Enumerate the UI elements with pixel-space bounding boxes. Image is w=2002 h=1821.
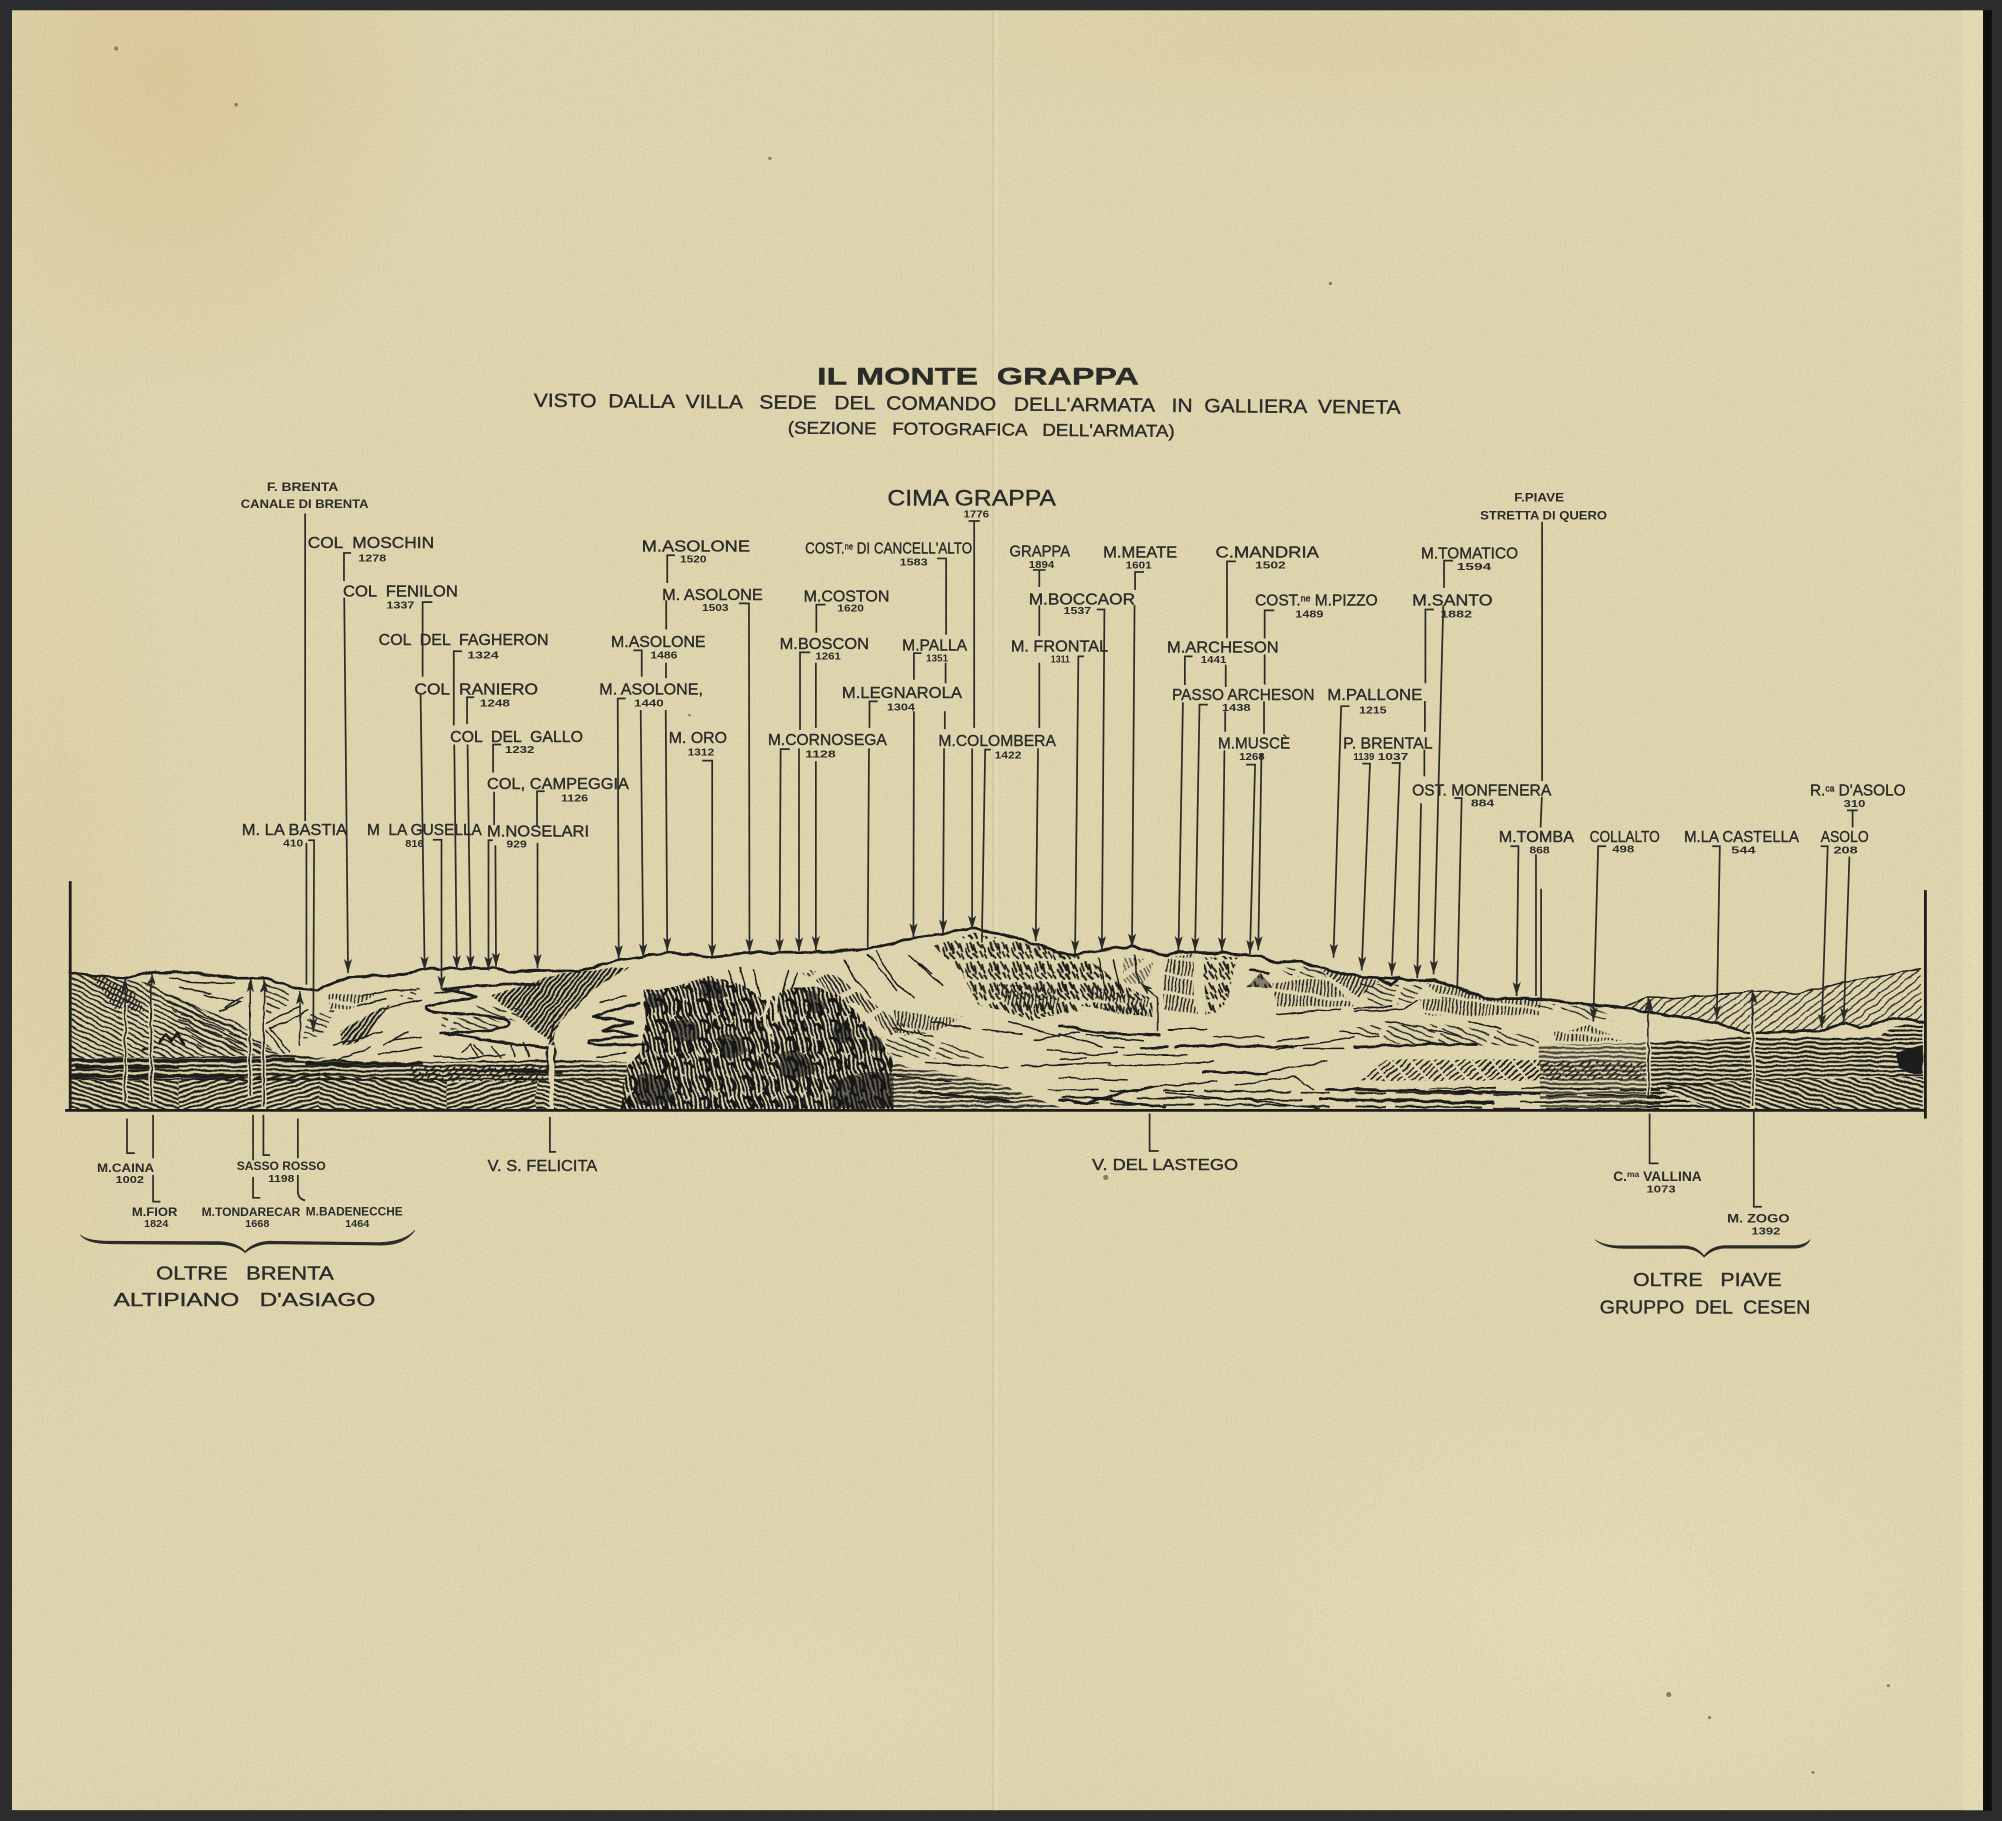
label: Ost. Monfenera 884: 884 <box>1471 799 1495 810</box>
label: M. Asolone 1503 <box>662 587 763 953</box>
label: M. Asolone 1440: M. ASOLONE, <box>599 681 703 698</box>
label: M. Noselari 929: 929 <box>506 840 527 851</box>
valley del Lastego: sparse lines <box>894 1022 1540 1108</box>
label: M. Tondarecar 1668: M.TONDARECAR <box>202 1205 301 1219</box>
label: M. Palla 1351 <box>902 637 967 937</box>
label: Costone di Cancell'Alto 1583: ne <box>845 542 853 552</box>
label: Col Campeggia 1126 <box>487 776 629 968</box>
label: M. Archeson 1441: 1441 <box>1201 655 1227 666</box>
label: F. Piave, Stretta di Quero: STRETTA DI QUERO <box>1480 509 1607 523</box>
label: Costone M. Pizzo 1489 <box>1255 592 1378 950</box>
label: Cima Grappa 1776: 1776 <box>963 510 989 521</box>
label: Costone di Cancell'Alto 1583 <box>805 541 972 933</box>
label: M. Colombera 1422 <box>938 733 1056 942</box>
label: M. Asolone 1520: M.ASOLONE <box>642 539 750 556</box>
label: C. Mandria 1502 <box>1215 544 1319 951</box>
label: M. Meate 1601: M.MEATE <box>1103 544 1177 561</box>
label: M. Archeson 1441 <box>1167 639 1279 950</box>
label: M. Caina 1002: 1002 <box>116 1175 144 1186</box>
label: M. Noselari 929: M.NOSELARI <box>487 823 589 840</box>
label: Asolo 208: ASOLO <box>1821 829 1869 846</box>
label: M. Pallone 1215 <box>1327 687 1422 958</box>
label: F. Piave, Stretta di Quero: F.PIAVE <box>1514 490 1564 504</box>
label: P. Brental 1139 and 1037: 1139 <box>1353 752 1375 763</box>
label: Grappa 1894 <box>1010 543 1070 941</box>
label: M. Asolone 1520 <box>642 539 750 951</box>
label: Col del Gallo 1232: 1232 <box>505 745 535 756</box>
label: M. Frontal 1311: M. FRONTAL <box>1011 638 1108 655</box>
label: M. Boccaor 1537 <box>1029 592 1135 950</box>
label: M. Palla 1351: M.PALLA <box>902 637 967 654</box>
label: M. Santo 1882 <box>1412 592 1493 978</box>
label: M. Palla 1351: 1351 <box>926 653 948 664</box>
up-pointing markers with halos inside terrain <box>125 972 1753 1110</box>
label: M. Asolone 1503: 1503 <box>702 603 729 614</box>
region label: Oltre Piave, Gruppo del Cesen <box>1600 1269 1810 1318</box>
label: Col del Gallo 1232 <box>450 729 583 967</box>
region label: Oltre Piave, Gruppo del Cesen: OLTRE PIAVE <box>1633 1269 1782 1290</box>
label: M. Fior 1824 <box>132 1115 178 1230</box>
label: Asolo 208 <box>1821 829 1869 1028</box>
label: Col Moschin 1278: COL MOSCHIN <box>308 535 434 552</box>
label: C. Mandria 1502: C.MANDRIA <box>1215 544 1319 561</box>
label: M. la Gusella 816: M LA GUSELLA <box>367 822 482 839</box>
label: M. Coston 1620 <box>804 588 889 950</box>
label: M. Colombera 1422: 1422 <box>995 751 1022 762</box>
label: Cima Grappa 1776 <box>887 486 1056 930</box>
label: M. Pallone 1215: M.PALLONE <box>1327 687 1422 704</box>
label: Costone M. Pizzo 1489: M.PIZZO <box>1310 592 1378 609</box>
panorama engraving of the Monte Grappa massif <box>70 928 1923 1110</box>
label: M. Pallone 1215: 1215 <box>1359 706 1387 717</box>
label: M. Asolone 1440: 1440 <box>634 699 664 710</box>
label: M. Colombera 1422: M.COLOMBERA <box>938 733 1056 750</box>
central slopes below Cima Grappa <box>807 933 1155 1060</box>
label: M. Caina 1002: M.CAINA <box>97 1161 154 1175</box>
region label: Oltre Brenta, Altipiano d'Asiago: ALTIPIANO D'ASIAGO <box>114 1289 375 1310</box>
label: M. Frontal 1311: 1311 <box>1051 655 1070 666</box>
label: M. la Castella 544: M.LA CASTELLA <box>1684 829 1799 846</box>
label: M. Tomatico 1594 <box>1421 545 1518 974</box>
labels centre group: Asolone, Coston, Cima Grappa <box>599 486 1056 959</box>
label: M. Asolone 1486 <box>611 634 706 958</box>
label: Rocca d'Asolo 310: D'ASOLO <box>1834 782 1906 799</box>
label: M. Asolone 1486: 1486 <box>650 651 678 662</box>
label: M. Tondarecar 1668 <box>202 1115 301 1230</box>
label: Cima Vallina 1073: VALLINA <box>1639 1169 1702 1184</box>
title block <box>534 363 1401 441</box>
brace: Oltre Piave <box>1595 1240 1810 1257</box>
label: M. Asolone 1486: M.ASOLONE <box>611 634 706 651</box>
label: M. la Castella 544: 544 <box>1731 846 1756 857</box>
label: M. Badenecche 1464: 1464 <box>345 1219 370 1230</box>
label: Costone M. Pizzo 1489: COST. <box>1255 592 1302 609</box>
eastern ridges: Archeson, Pallone, Monfenera <box>1085 954 1623 1041</box>
label: Passo Archeson 1438 <box>1172 687 1314 951</box>
label: Col Fenilon 1337: COL FENILON <box>343 583 458 600</box>
label: Col del Fagheron 1324: 1324 <box>467 651 499 662</box>
label: M. Tomba 868 <box>1499 829 1574 996</box>
label: Rocca d'Asolo 310 <box>1810 782 1906 1022</box>
label: Col Moschin 1278 <box>308 535 434 973</box>
label: F. Brenta, Canale di Brenta <box>241 480 369 985</box>
label: V. S. Felicita: V. S. FELICITA <box>488 1158 598 1175</box>
label: Col Fenilon 1337: 1337 <box>386 601 415 612</box>
label: M. Archeson 1441: M.ARCHESON <box>1167 639 1279 656</box>
label: M. Asolone 1503: M. ASOLONE <box>662 587 763 604</box>
label: V. del Lastego <box>1092 1114 1238 1174</box>
label: Rocca d'Asolo 310: R. <box>1810 782 1826 799</box>
subtitle: VISTO DALLA VILLA SEDE DEL COMANDO DELL'ARMATA IN GALLIERA VENETA <box>534 391 1401 419</box>
ridgeline of the massif <box>70 928 1647 1011</box>
label: Cima Vallina 1073 <box>1613 1114 1702 1196</box>
label: Cima Vallina 1073: 1073 <box>1647 1185 1676 1196</box>
label: M. Meate 1601 <box>1103 544 1177 948</box>
label: Ost. Monfenera 884 <box>1412 783 1552 986</box>
label: M. Tomba 868: 868 <box>1529 846 1550 857</box>
label: M. Boscon 1261: M.BOSCON <box>780 636 869 653</box>
label: C. Mandria 1502: 1502 <box>1255 561 1286 572</box>
label: M. Asolone 1520: 1520 <box>680 555 707 566</box>
label: P. Brental 1139 and 1037 <box>1343 735 1433 976</box>
brace: Oltre Brenta <box>80 1230 415 1253</box>
label: F. Brenta, Canale di Brenta: F. BRENTA <box>267 480 339 494</box>
title: Il Monte Grappa: IL MONTE GRAPPA <box>817 363 1139 390</box>
label: M. Coston 1620: 1620 <box>837 604 864 615</box>
label: P. Brental 1139 and 1037: P. BRENTAL <box>1343 735 1433 752</box>
label: Costone di Cancell'Alto 1583: COST. <box>805 541 852 558</box>
label: M. Zogo 1392 <box>1727 1110 1790 1238</box>
label: M. Badenecche 1464: M.BADENECCHE <box>306 1205 403 1219</box>
label: M. Cornosega 1128 <box>768 732 887 953</box>
labels right group: Grappa to Monfenera <box>1010 490 1906 1028</box>
label: M. la Bastia 410: 410 <box>283 838 303 849</box>
label: Grappa 1894: 1894 <box>1029 560 1055 571</box>
label: M. Fior 1824: 1824 <box>144 1219 169 1230</box>
labels below the panorama: Lastego and Gruppo del Cesen <box>1092 1110 1810 1318</box>
label: M. Tondarecar 1668: 1668 <box>245 1219 270 1230</box>
label: M. Badenecche 1464 <box>298 1119 403 1230</box>
label: M. Tomatico 1594: M.TOMATICO <box>1421 545 1518 562</box>
label: M. Legnarola 1304: 1304 <box>887 702 915 713</box>
region label: Oltre Piave, Gruppo del Cesen: GRUPPO DEL CESEN <box>1600 1297 1810 1318</box>
label: M. Santo 1882: 1882 <box>1440 610 1473 621</box>
label: M. la Bastia 410: M. LA BASTIA <box>242 822 347 839</box>
label: Col del Gallo 1232: COL DEL GALLO <box>450 729 583 746</box>
label: M. Zogo 1392: M. ZOGO <box>1727 1212 1790 1226</box>
label: M. Tomba 868: M.TOMBA <box>1499 829 1574 846</box>
label: F. Brenta, Canale di Brenta: CANALE DI BRENTA <box>241 497 369 511</box>
label: M. Legnarola 1304: M.LEGNAROLA <box>842 685 962 702</box>
label: M. la Castella 544 <box>1684 829 1799 1019</box>
frame uprights and base line of the panorama <box>65 881 1925 1119</box>
label: F. Piave, Stretta di Quero <box>1480 490 1607 999</box>
label: Col del Fagheron 1324: COL DEL FAGHERON <box>379 632 549 649</box>
region label: Oltre Brenta, Altipiano d'Asiago: OLTRE BRENTA <box>156 1262 334 1283</box>
label: Sasso Rosso 1198 <box>237 1115 326 1185</box>
subtitle note: (SEZIONE FOTOGRAFICA DELL'ARMATA) <box>788 418 1175 441</box>
label: M. Coston 1620: M.COSTON <box>804 588 889 605</box>
label: M. Tomatico 1594: 1594 <box>1457 562 1492 573</box>
label: M. Boccaor 1537: M.BOCCAOR <box>1029 592 1135 609</box>
label: Sasso Rosso 1198: 1198 <box>268 1174 295 1185</box>
label: Col Moschin 1278: 1278 <box>358 553 387 564</box>
region label: Oltre Brenta, Altipiano d'Asiago <box>114 1262 375 1310</box>
label: M. Cornosega 1128: M.CORNOSEGA <box>768 732 887 749</box>
label: M. Cornosega 1128: 1128 <box>805 749 836 760</box>
label: Cima Vallina 1073: ma <box>1627 1169 1640 1179</box>
label: Rocca d'Asolo 310: 310 <box>1844 799 1866 810</box>
label: Col Campeggia 1126: COL, CAMPEGGIA <box>487 776 629 793</box>
label: Passo Archeson 1438: PASSO ARCHESON <box>1172 687 1314 704</box>
label: M. Frontal 1311 <box>1011 638 1108 954</box>
label: M. la Gusella 816: 816 <box>405 839 424 850</box>
label: Collalto 498: COLLALTO <box>1590 829 1660 846</box>
label: M. Boscon 1261: 1261 <box>815 652 841 663</box>
label: P. Brental 1139 and 1037: 1037 <box>1378 752 1409 763</box>
label: Asolo 208: 208 <box>1833 846 1858 857</box>
label: M. la Gusella 816 <box>367 822 482 990</box>
label: Costone di Cancell'Alto 1583: DI CANCELL'ALTO <box>853 541 972 558</box>
hills between Brenta valley and Col Raniero <box>304 967 644 1070</box>
label: Col Raniero 1248: 1248 <box>480 699 510 710</box>
label: M. la Bastia 410 <box>242 822 347 1032</box>
label: M. Legnarola 1304 <box>842 685 962 948</box>
label: M. Meate 1601: 1601 <box>1126 561 1152 572</box>
label: Ost. Monfenera 884: OST. MONFENERA <box>1412 783 1552 800</box>
far ridge hatched: Gruppo del Cesen <box>1623 969 1923 1033</box>
label: Collalto 498: 498 <box>1612 844 1635 855</box>
label: Costone M. Pizzo 1489: 1489 <box>1295 610 1324 621</box>
label: M. Santo 1882: M.SANTO <box>1412 592 1493 609</box>
label: M. Boccaor 1537: 1537 <box>1064 606 1092 617</box>
labels left group: Brenta and Col peaks <box>241 480 629 1032</box>
label: M. Boscon 1261 <box>780 636 869 951</box>
label: Rocca d'Asolo 310: ca <box>1825 783 1834 793</box>
label: Col Raniero 1248: COL RANIERO <box>414 681 538 698</box>
label: M. Caina 1002 <box>97 1119 154 1186</box>
lower band of horizontal and herringbone hatching <box>70 1022 1923 1110</box>
label: Collalto 498 <box>1590 829 1660 1022</box>
label: Cima Vallina 1073: C. <box>1613 1169 1627 1184</box>
label: M. Oro 1312: 1312 <box>688 748 715 759</box>
label: Costone M. Pizzo 1489: ne <box>1301 593 1310 603</box>
left slope hatching: Altipiano d'Asiago <box>70 974 308 1059</box>
label: M. Asolone 1440 <box>599 681 703 959</box>
label: Passo Archeson 1438: 1438 <box>1222 703 1251 714</box>
label: M. Oro 1312: M. ORO <box>669 730 727 747</box>
label: M. Muscè 1268: 1268 <box>1239 752 1265 763</box>
label: Col Raniero 1248 <box>414 681 538 969</box>
label: M. Noselari 929 <box>487 823 589 971</box>
label: Cima Grappa 1776: CIMA GRAPPA <box>887 486 1056 511</box>
label: M. Oro 1312 <box>669 730 727 958</box>
label: M. Fior 1824: M.FIOR <box>132 1205 178 1219</box>
label: Col del Fagheron 1324 <box>379 632 549 969</box>
label: Grappa 1894: GRAPPA <box>1010 543 1070 560</box>
label: V. S. Felicita <box>488 1117 598 1175</box>
label: Col Fenilon 1337 <box>343 583 458 971</box>
label: V. del Lastego: V. DEL LASTEGO <box>1092 1157 1238 1174</box>
label: M. Muscè 1268 <box>1218 733 1290 954</box>
label: M. Zogo 1392: 1392 <box>1751 1227 1781 1238</box>
forest on the lower Monte Grappa slope <box>621 968 894 1110</box>
label: M. Muscè 1268: M.MUSCÈ <box>1218 733 1290 752</box>
labels below the panorama: Altipiano d'Asiago peaks <box>80 1115 598 1310</box>
label: Sasso Rosso 1198: SASSO ROSSO <box>237 1159 326 1173</box>
label: Costone di Cancell'Alto 1583: 1583 <box>900 557 928 568</box>
label: Col Campeggia 1126: 1126 <box>561 793 588 804</box>
